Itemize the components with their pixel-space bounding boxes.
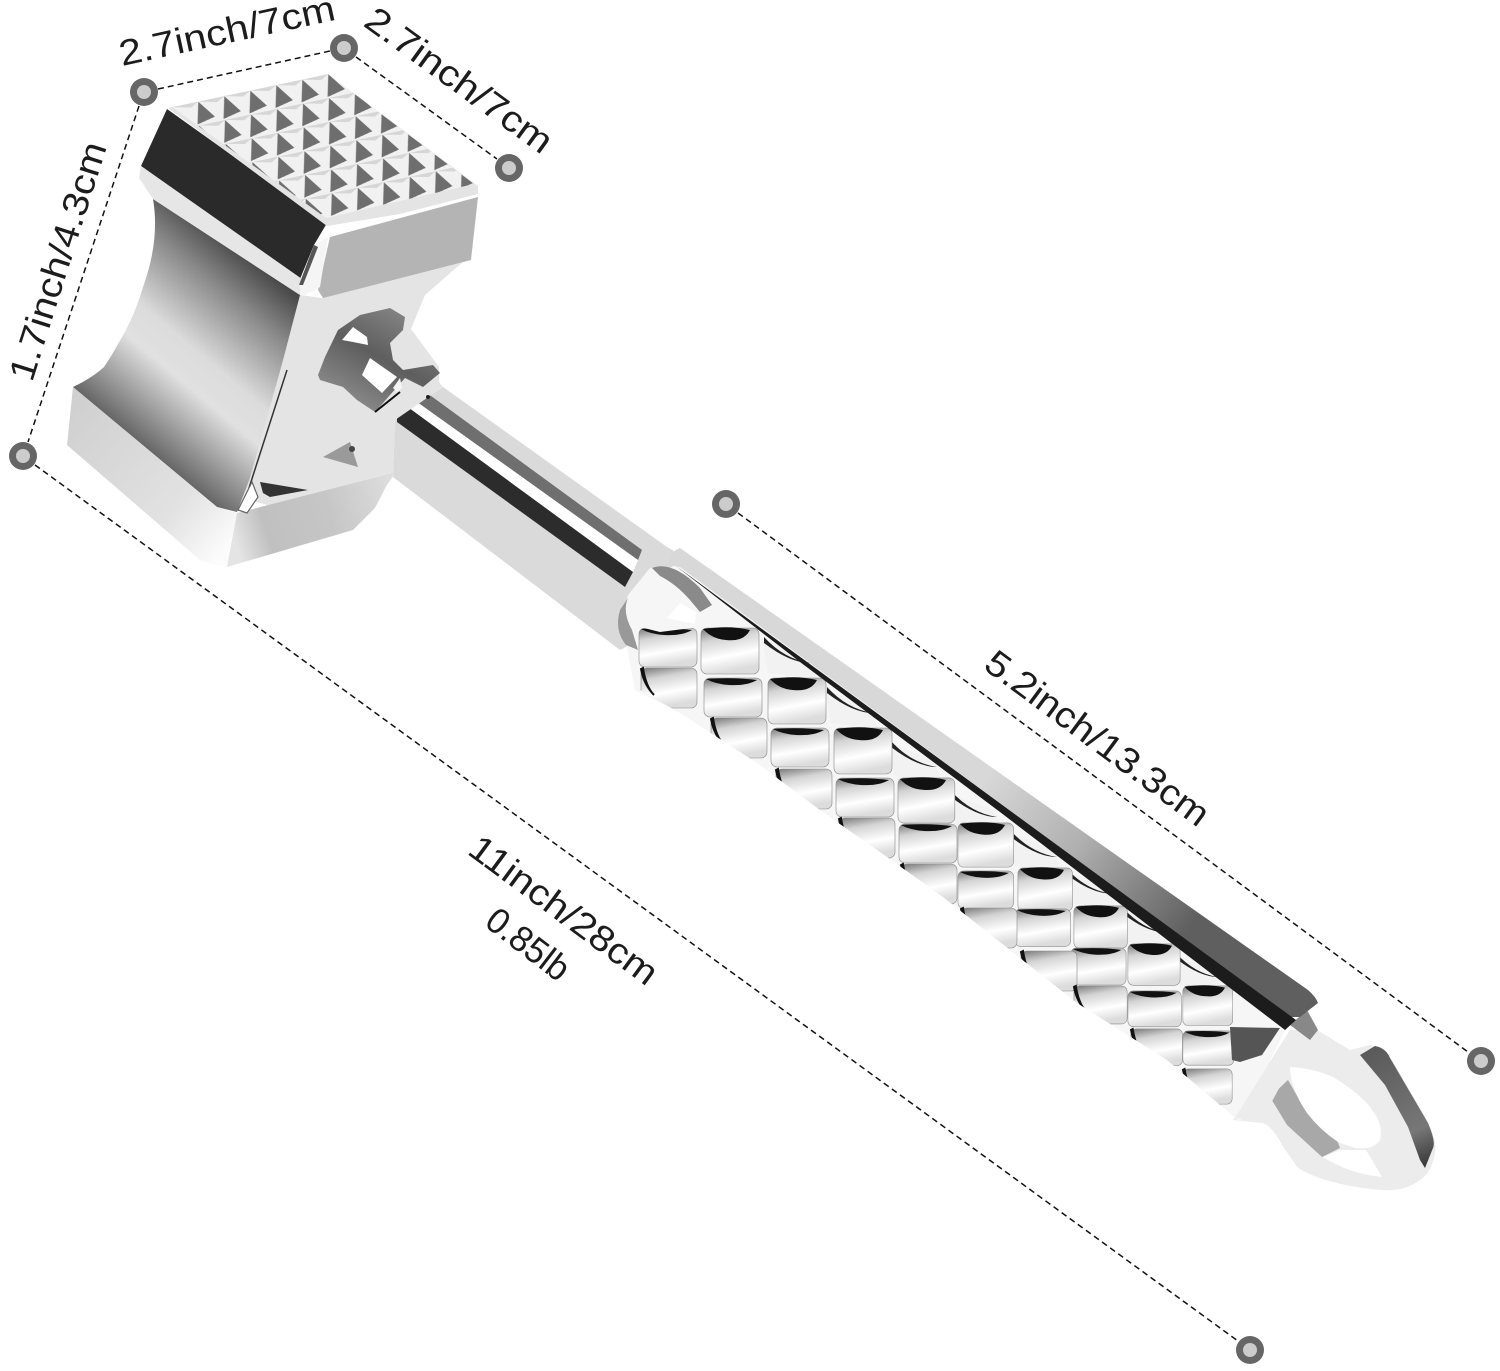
toothed striking face [168,74,478,226]
corner highlight [299,237,328,296]
dimension: head depth 2.7inch/7cm: 2.7inch/7cm [357,0,561,162]
right side of head [318,197,478,298]
diamond cells [639,627,1234,1104]
dimension: total length 11inch/28cm and weight 0.85lb: 11inch/28cm [461,826,666,993]
dimension: handle length 5.2inch/13.3cm: 5.2inch/13.3cm [977,641,1218,834]
face edge line [249,370,287,488]
dark side of head [141,109,327,279]
dimension: total length 11inch/28cm and weight 0.85lb [35,465,1238,1341]
base underside [227,473,393,567]
shaft [393,387,690,650]
concave front face [73,199,300,512]
dimension: handle length 5.2inch/13.3cm [738,513,1468,1052]
head top band edge [139,166,302,295]
hammer head [67,74,478,567]
neck and body [153,199,471,530]
light back band [668,548,1318,1030]
corner glint [238,482,258,513]
lower rim [67,387,237,567]
textured grip [620,560,1305,1122]
eyelet end [1233,1010,1436,1190]
dimension: total length 11inch/28cm and weight 0.85lb: 0.85lb [478,899,578,989]
dimension: head height 1.7inch/4.3cm [1,106,139,442]
collar [618,566,715,650]
meat hammer illustration [67,74,1436,1190]
dimension: head height 1.7inch/4.3cm: 1.7inch/4.3cm [1,137,115,385]
notch shadows [260,482,308,497]
neck cavity [318,308,440,412]
